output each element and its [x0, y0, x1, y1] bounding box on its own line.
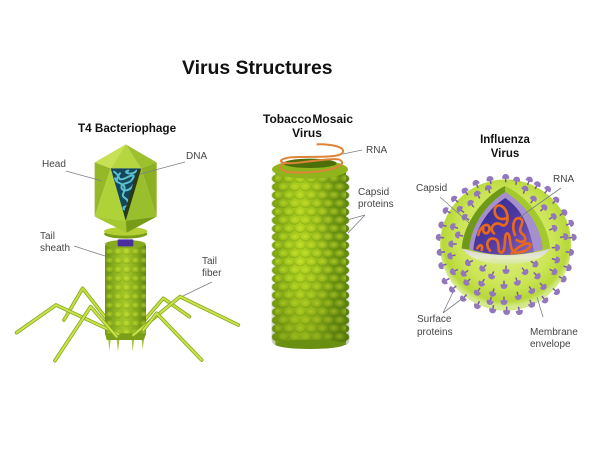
title: Virus Structures: [182, 57, 333, 79]
label: Capsid proteins: [347, 187, 394, 233]
panel: Influenza Virus: [416, 134, 578, 350]
heading: T4 Bacteriophage: T4 Bacteriophage: [78, 122, 177, 135]
tail fibers behind: [64, 288, 189, 335]
label: DNA: DNA: [186, 151, 207, 162]
label: Capsid: Capsid: [416, 183, 447, 194]
label: Tail sheath: Tail: [40, 231, 55, 242]
heading: Influenza Virus: Influenza: [480, 134, 531, 146]
label: RNA: [520, 174, 574, 217]
label: Surface proteins: [417, 292, 463, 338]
head capsid: [95, 144, 157, 233]
heading: Tobacco Mosaic Virus: [263, 112, 353, 140]
DNA window: [111, 168, 141, 221]
RNA coil: [280, 144, 343, 173]
label: Capsid: [416, 183, 475, 228]
label: RNA: RNA: [366, 145, 387, 156]
phage illustration: [17, 144, 238, 361]
label: Tail sheath: sheath: [40, 243, 70, 254]
heading: Influenza Virus: Virus: [491, 148, 519, 160]
panel: T4 bacteriophage: [17, 122, 238, 361]
label: Capsid proteins: proteins: [358, 199, 394, 210]
tail fibers front: [17, 297, 238, 361]
heading: Influenza Virus: [480, 134, 531, 160]
label: Membrane envelope: [530, 297, 578, 350]
heading: Tobacco Mosaic Virus: Tobacco Mosaic: [263, 112, 353, 126]
label: Head: Head: [42, 159, 66, 170]
surface proteins: [435, 174, 577, 316]
label: Tail fiber: fiber: [202, 268, 222, 279]
label: Tail sheath: [40, 231, 105, 256]
tail sheath: [105, 240, 146, 352]
label: RNA: RNA: [553, 174, 574, 185]
label: Tail fiber: Tail: [202, 256, 217, 267]
label: DNA: [140, 151, 207, 174]
panel: Tobacco Mosaic Virus: [263, 112, 394, 349]
label: Capsid proteins: Capsid: [358, 187, 389, 198]
label: Tail fiber: [183, 256, 222, 296]
rod illustration: [272, 144, 349, 349]
RNA strand: [477, 205, 530, 253]
capsid rod: [272, 159, 349, 349]
purple neck: [118, 239, 133, 246]
label: Membrane envelope: Membrane: [530, 327, 578, 338]
cutaway capsid: [462, 186, 550, 265]
label: RNA: [343, 145, 387, 156]
influenza illustration: [435, 174, 577, 316]
label: Membrane envelope: envelope: [530, 339, 571, 350]
label: Surface proteins: proteins: [417, 327, 453, 338]
label: Surface proteins: Surface: [417, 314, 452, 325]
collar disc: [104, 227, 147, 239]
heading: Tobacco Mosaic Virus: Virus: [292, 126, 322, 140]
outer membrane: [440, 179, 571, 311]
label: Head: [42, 159, 102, 181]
